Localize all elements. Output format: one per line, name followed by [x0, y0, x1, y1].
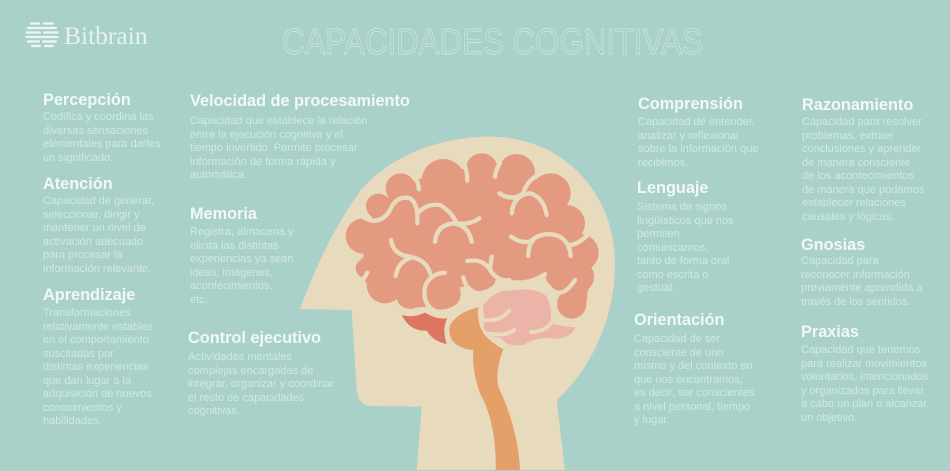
block: Praxias: [801, 323, 928, 424]
title: CAPACIDADES COGNITIVAS: [282, 21, 703, 62]
block: Atención: Atención: [43, 175, 113, 193]
block: Velocidad de procesamiento: tiempo invertido. Permite procesar: [190, 142, 358, 154]
block: Praxias: para realizar movimientos: [801, 358, 927, 370]
block: Razonamiento: problemas, extraer: [802, 130, 894, 142]
block: Atención: activación adecuado: [43, 236, 143, 248]
block: Aprendizaje: [43, 286, 153, 427]
block: Lenguaje: comunicarnos,: [637, 242, 709, 254]
block: Aprendizaje: distintas experiencias: [43, 361, 148, 373]
block: Lenguaje: Lenguaje: [637, 179, 708, 197]
block: Percepción: Percepción: [43, 91, 131, 109]
block: Razonamiento: Capacidad para resolver: [802, 116, 922, 128]
block: Praxias: a cabo un plan o alcanzar: [801, 398, 927, 410]
brain cerebrum: [346, 153, 599, 319]
block: Control ejecutivo: Control ejecutivo: [188, 329, 321, 347]
block: Velocidad de procesamiento: automática.: [190, 169, 247, 181]
block: Razonamiento: de manera que podamos: [802, 184, 924, 196]
block: Razonamiento: de los acontecimientos: [802, 170, 914, 182]
block: Memoria: etc.: [190, 294, 208, 306]
block: Orientación: que nos encontramos,: [634, 374, 743, 386]
block: Razonamiento: [802, 96, 924, 222]
block: Lenguaje: como escrita o: [637, 268, 709, 280]
block: Lenguaje: permiten: [637, 228, 680, 240]
block: Aprendizaje: que dan lugar a la: [43, 374, 131, 386]
block: Control ejecutivo: Actividades mentales: [188, 351, 292, 363]
block: Memoria: elicita las distintas: [190, 240, 279, 252]
block: Lenguaje: [637, 179, 734, 294]
block: Percepción: diversas sensaciones: [43, 124, 148, 136]
block: Aprendizaje: suscitadas por: [43, 348, 114, 360]
block: Aprendizaje: habilidades.: [43, 415, 102, 427]
block: Orientación: a nivel personal, tiempo: [634, 400, 750, 412]
block: Atención: Capacidad de generar,: [43, 195, 154, 207]
block: Memoria: acontecimientos,: [190, 280, 273, 292]
block: Control ejecutivo: [188, 329, 334, 417]
block: Velocidad de procesamiento: entre la ejecución cognitiva y el: [190, 128, 343, 140]
block: Gnosias: Gnosias: [801, 236, 865, 254]
block: Orientación: es decir, ser conscientes: [634, 387, 754, 399]
block: Gnosias: previamente aprendida a: [801, 282, 923, 294]
block: Velocidad de procesamiento: Velocidad de procesamiento: [190, 92, 410, 110]
block: Memoria: experiencias ya sean: [190, 253, 293, 265]
block: Razonamiento: establecer relaciones: [802, 197, 906, 209]
block: Control ejecutivo: integrar, organizar y coordinar: [188, 378, 334, 390]
block: Control ejecutivo: cognitivas.: [188, 405, 240, 417]
block: Orientación: y lugar.: [634, 414, 669, 426]
block: Razonamiento: de manera consciente: [802, 156, 910, 168]
block: Comprensión: recibimos.: [638, 156, 688, 168]
block: Atención: [43, 175, 154, 274]
block: Percepción: [43, 91, 160, 164]
block: Razonamiento: conclusiones y aprender: [802, 143, 921, 155]
block: Atención: información relevante.: [43, 262, 151, 274]
block: Memoria: Memoria: [190, 205, 257, 223]
block: Velocidad de procesamiento: [190, 92, 410, 181]
block: Atención: seleccionar, dirigir y: [43, 208, 140, 220]
block: Percepción: Codifica y coordina las: [43, 111, 154, 123]
brain folds: [363, 163, 588, 312]
block: Praxias: Praxias: [801, 323, 859, 341]
block: Comprensión: Comprensión: [638, 95, 743, 113]
block: Gnosias: [801, 236, 923, 308]
block: Percepción: elementales para darles: [43, 138, 160, 150]
icon: striped brain: [26, 22, 58, 48]
block: Memoria: Registra, almacena y: [190, 226, 293, 238]
block: Comprensión: Capacidad de entender,: [638, 116, 755, 128]
block: Aprendizaje: Aprendizaje: [43, 286, 135, 304]
block: Atención: mantener un nivel de: [43, 222, 146, 234]
block: Comprensión: analizar y reflexionar: [638, 130, 740, 142]
brain stem: [449, 307, 520, 470]
block: Gnosias: Capacidad para: [801, 255, 879, 267]
block: Razonamiento: Razonamiento: [802, 96, 913, 114]
block: Aprendizaje: relativamente estables: [43, 320, 153, 332]
block: Comprensión: sobre la información que: [638, 143, 758, 155]
block: Lenguaje: lingüísticos que nos: [637, 214, 734, 226]
block: Orientación: mismo y del contexto en: [634, 360, 753, 372]
block: Praxias: Capacidad que tenemos: [801, 344, 920, 356]
block: Lenguaje: tanto de forma oral: [637, 255, 729, 267]
block: Aprendizaje: conocimientos y: [43, 402, 122, 414]
block: Razonamiento: causales y lógicas.: [802, 210, 894, 222]
block: Orientación: [634, 311, 754, 426]
block: Orientación: Orientación: [634, 311, 724, 329]
block: Atención: para procesar la: [43, 249, 122, 261]
block: Aprendizaje: en el comportamiento: [43, 334, 149, 346]
logo: Bitbrain: [26, 21, 148, 50]
block: Praxias: un objetivo.: [801, 412, 857, 424]
block: Velocidad de procesamiento: información de forma rápida y: [190, 156, 336, 168]
block: Memoria: [190, 205, 294, 306]
block: Percepción: un significado.: [43, 152, 113, 164]
head silhouette: [300, 137, 615, 470]
block: Memoria: ideas, imágenes,: [190, 266, 273, 278]
block: Lenguaje: gestual.: [637, 282, 676, 294]
block: Velocidad de procesamiento: Capacidad que establece la relación: [190, 115, 367, 127]
block: Orientación: Capacidad de ser: [634, 333, 720, 345]
logo wordmark: Bitbrain: [64, 21, 148, 50]
block: Gnosias: reconocer información: [801, 268, 910, 280]
block: Orientación: consciente de uno: [634, 346, 723, 358]
block: Aprendizaje: adquisición de nuevos: [43, 388, 152, 400]
block: Control ejecutivo: complejas encargadas de: [188, 364, 313, 376]
block: Comprensión: [638, 95, 758, 168]
block: Aprendizaje: Transformaciones: [43, 307, 131, 319]
block: Praxias: y organizados para llevar: [801, 384, 924, 396]
cerebellum: [402, 313, 447, 344]
block: Lenguaje: Sistema de signos: [637, 201, 727, 213]
block: Control ejecutivo: el resto de capacidades: [188, 392, 304, 404]
block: Praxias: voluntarios, intencionados: [801, 371, 928, 383]
brain occipital lobe: [483, 290, 576, 345]
block: Gnosias: través de los sentidos.: [801, 296, 910, 308]
